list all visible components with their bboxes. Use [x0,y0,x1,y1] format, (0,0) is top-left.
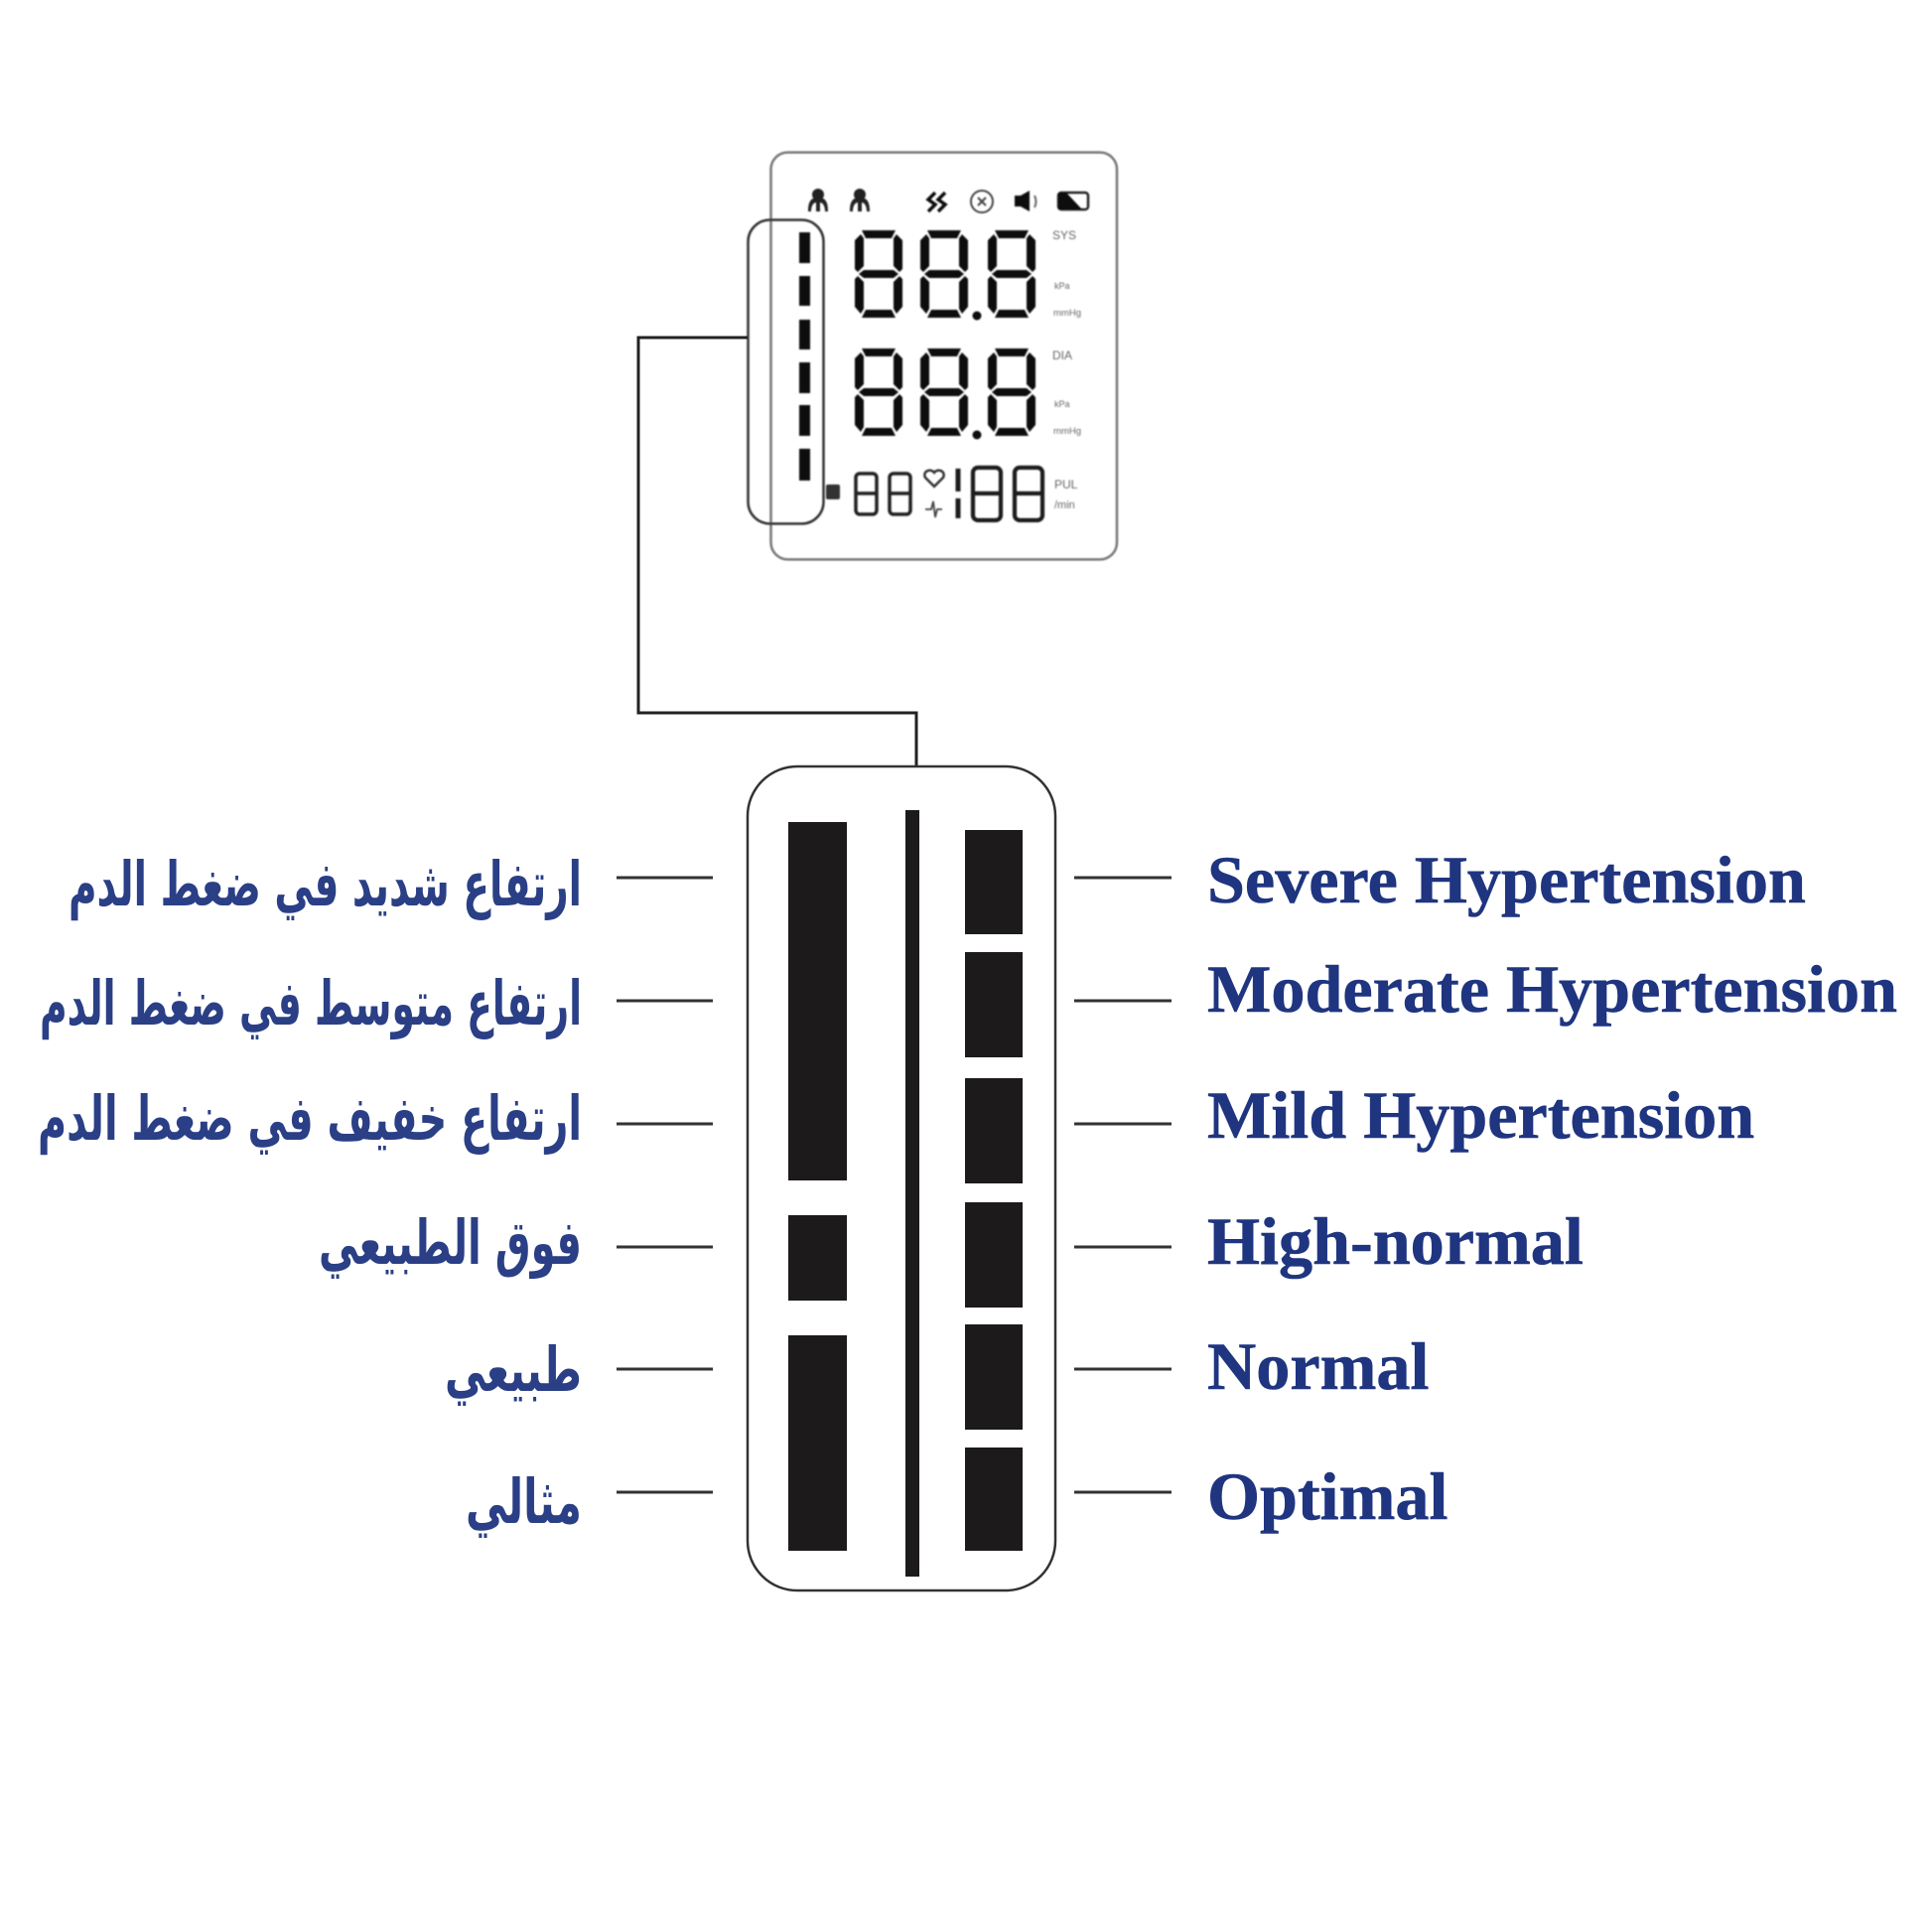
label: severe hypertension: ارتفاع شديد في ضغط الدم [69,848,582,921]
icon: circled cross [971,191,993,212]
left tick lines [617,878,713,1492]
icon: pulse wave [925,501,942,517]
English labels [1207,842,1897,1534]
label: optimal: مثالي [466,1465,582,1538]
decimal point [973,431,981,439]
label: Severe Hypertension: Severe Hypertension [1207,842,1806,917]
digit [988,230,1035,318]
label: Moderate Hypertension: Moderate Hypertension [1207,951,1897,1027]
label: mild hypertension: ارتفاع خفيف في ضغط الدم [38,1082,582,1156]
unit labels: /min [1054,499,1075,511]
digit [988,348,1035,436]
systolic reading digits [855,230,1035,320]
label: high normal: فوق الطبيعي [319,1206,582,1279]
label: normal: طبيعي [445,1333,582,1406]
diastolic reading digits [855,348,1035,439]
unit labels [1052,228,1081,511]
icon: speaker [1015,191,1036,211]
icon: battery [1058,193,1088,209]
pulse number digits [958,468,1042,520]
decimal point [973,312,981,320]
icon: person one [808,189,828,211]
panel outline [748,766,1055,1590]
label: High-normal: High-normal [1207,1203,1584,1279]
left grouped bars [788,822,847,1551]
digit [920,348,968,436]
digit [855,348,902,436]
digit [855,230,902,318]
unit labels: kPa [1054,281,1070,291]
highlight around indicator segments [749,220,824,524]
label: Mild Hypertension: Mild Hypertension [1207,1077,1754,1153]
Arabic labels [38,848,582,1538]
icon: person two [850,189,870,211]
icon: heart [924,471,944,486]
unit labels: PUL [1054,478,1078,491]
right tick lines [1074,878,1172,1492]
label: moderate hypertension: ارتفاع متوسط في ضغط الدم [40,967,582,1040]
indicator segments in display [799,232,810,481]
memory number digits [856,474,910,514]
unit labels: mmHg [1053,308,1081,319]
centre bar [905,810,919,1577]
LCD outer frame [770,153,1117,560]
digit [920,230,968,318]
unit labels: mmHg [1053,426,1081,437]
unit labels: DIA [1052,348,1072,362]
unit labels: SYS [1052,228,1076,242]
icon: memory marker [826,484,840,499]
panel: enlarged indicator scale [748,766,1055,1590]
label: Optimal: Optimal [1207,1458,1448,1534]
arrow: connector from display to enlarged scale [638,338,916,766]
label: Normal: Normal [1207,1328,1429,1404]
panel: monitor LCD display [749,153,1117,560]
right level bars [965,830,1023,1551]
icon: irregular signal [928,193,945,211]
unit labels: kPa [1054,399,1070,409]
